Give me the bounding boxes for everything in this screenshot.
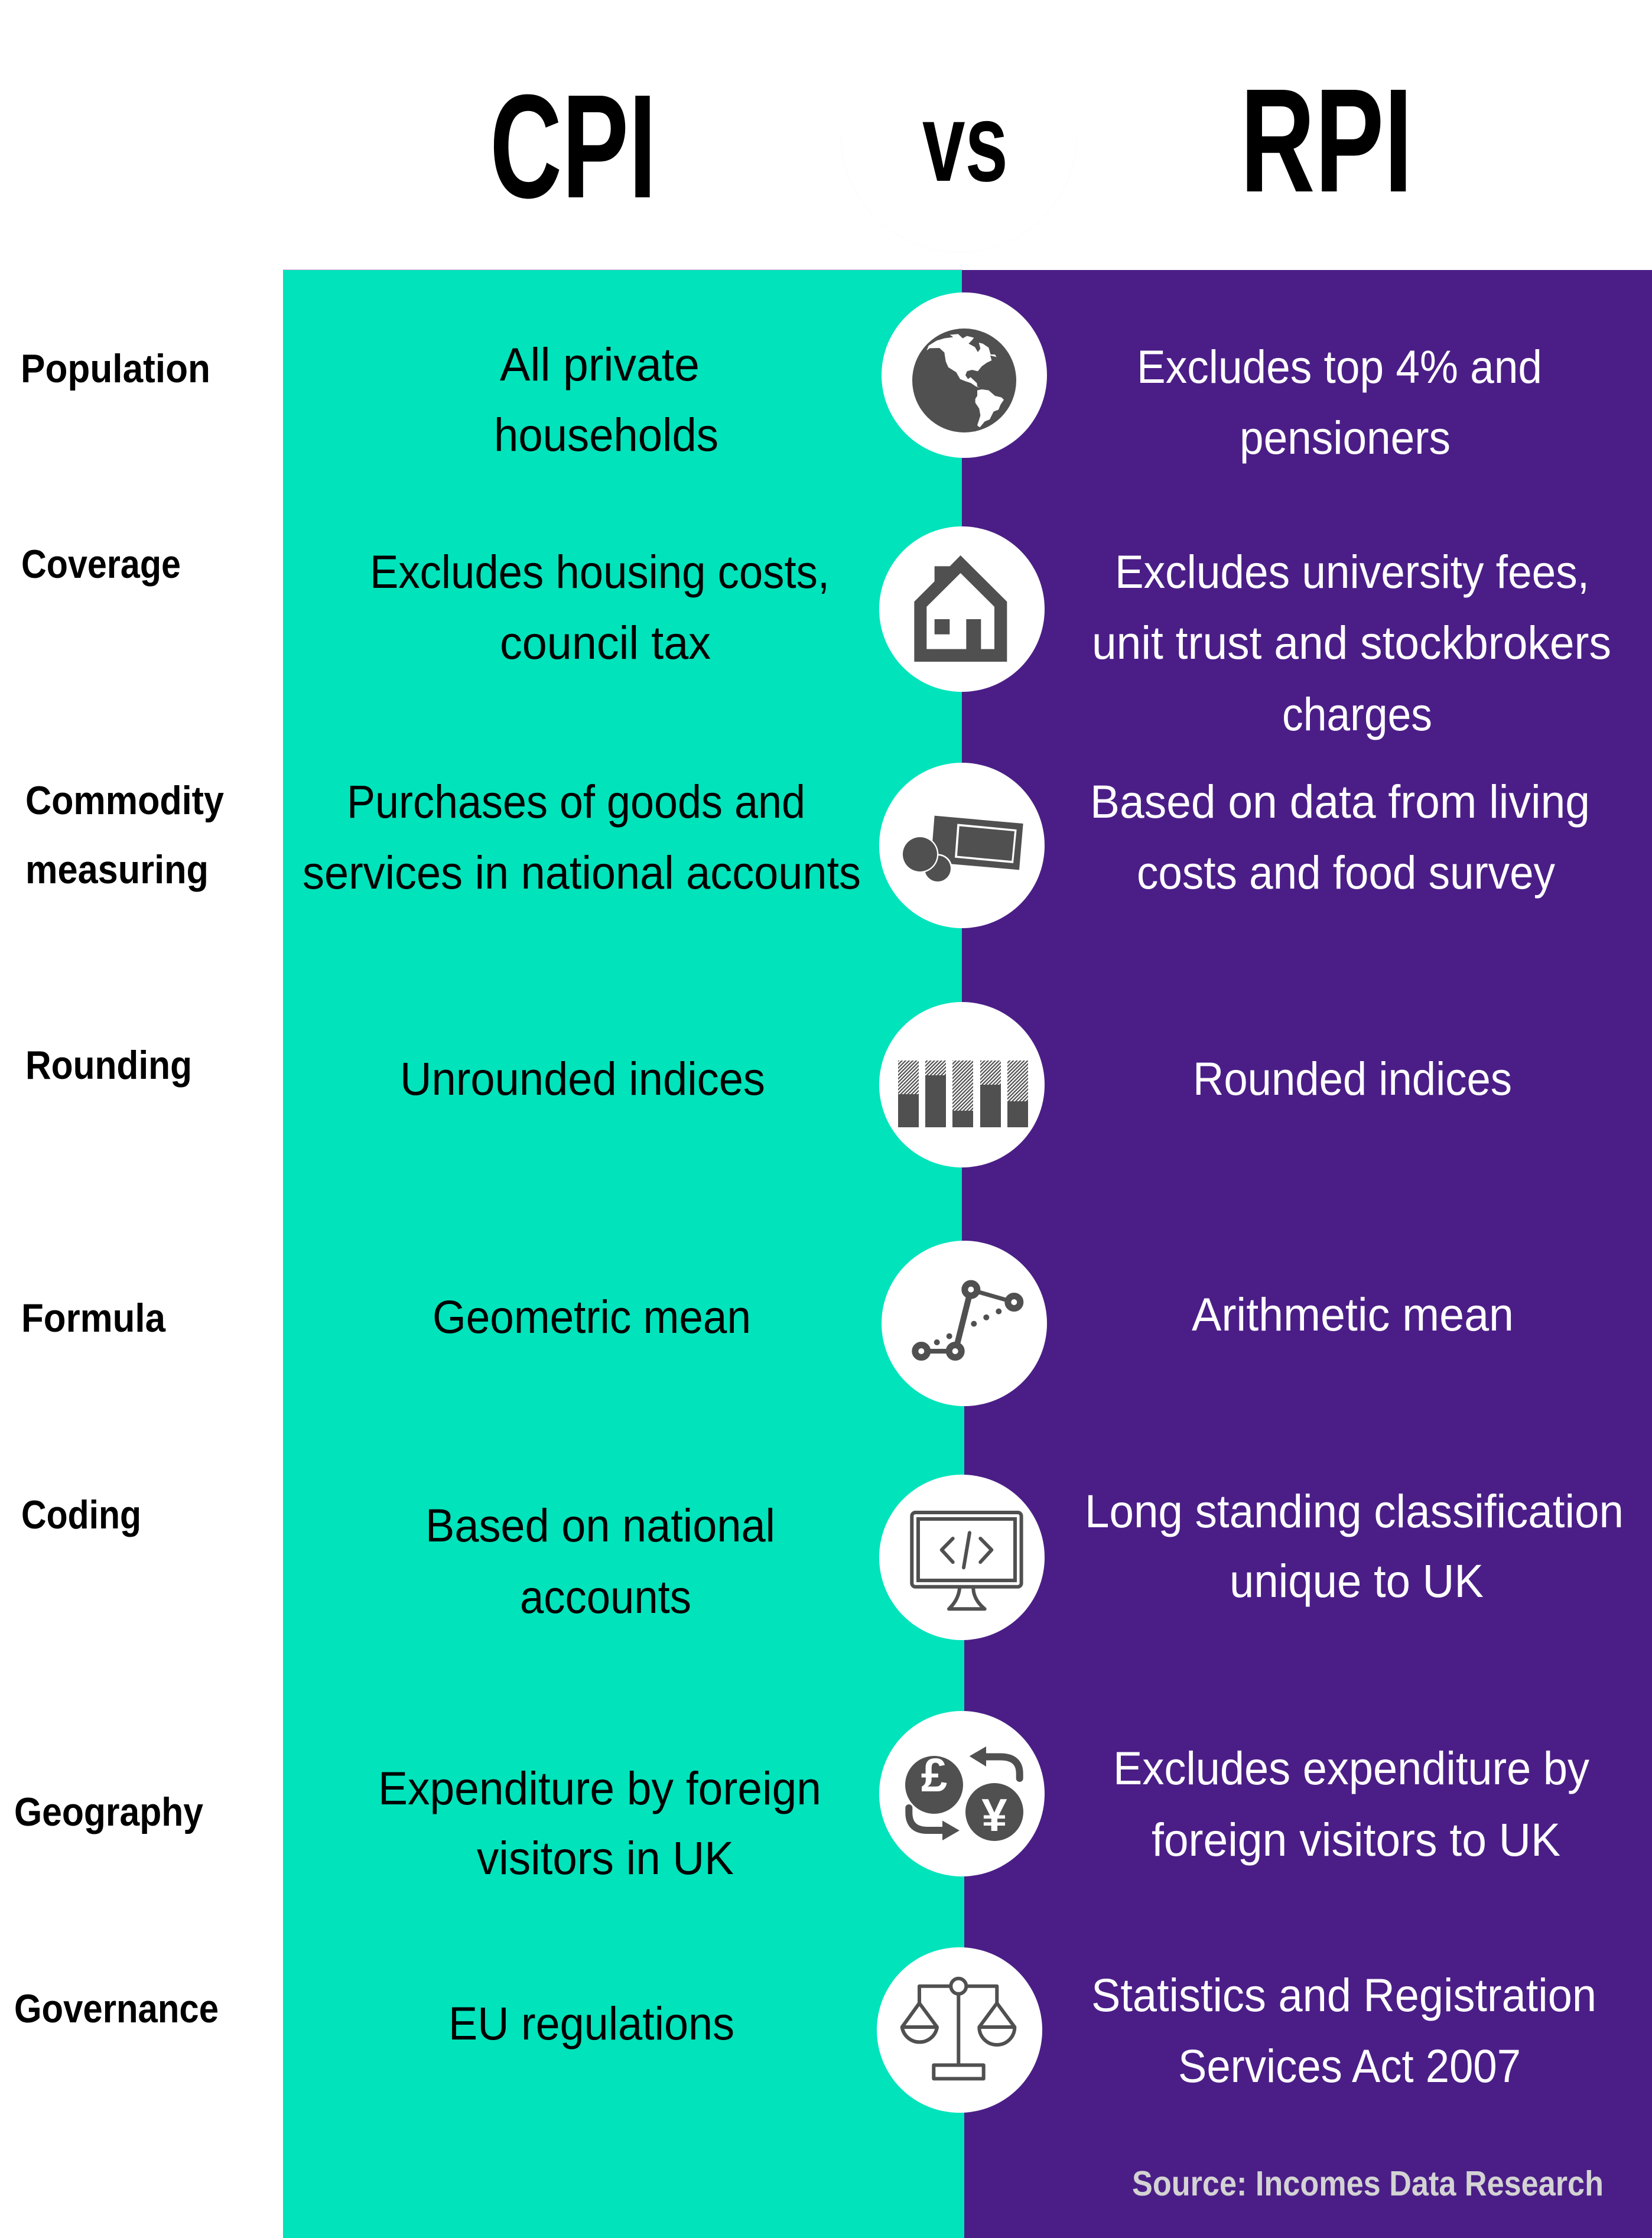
CPI text: geography: visitors in UK — [477, 1832, 734, 1884]
CPI text: governance: EU regulations — [448, 1997, 734, 2050]
RPI text: geography: Excludes expenditure by — [1113, 1742, 1589, 1794]
CPI text: population: households — [494, 408, 718, 461]
RPI text: governance: Statistics and Registration — [1091, 1969, 1596, 2021]
icon: house — [879, 526, 1045, 692]
row label: Rounding: Rounding — [25, 1043, 192, 1088]
RPI text: coverage: unit trust and stockbrokers — [1092, 616, 1611, 669]
icon: currency exchange — [879, 1711, 1045, 1876]
icon: balance scales — [877, 1947, 1042, 2113]
RPI text: commodity measuring: costs and food survey — [1137, 846, 1555, 899]
CPI text: commodity measuring: services in national accounts — [303, 846, 861, 899]
row label: Coding: Coding — [21, 1492, 141, 1537]
heading: vs: vs — [922, 80, 1008, 204]
CPI text: coverage: council tax — [500, 616, 711, 669]
RPI text: coverage — [1092, 545, 1611, 740]
RPI text: commodity measuring — [1090, 775, 1590, 899]
row label: Coverage: Coverage — [21, 542, 181, 587]
source note: Source: Incomes Data Research — [1132, 2164, 1604, 2203]
RPI text: population: pensioners — [1240, 411, 1451, 464]
icon: globe — [882, 292, 1047, 458]
RPI text: coding — [1085, 1485, 1624, 1607]
CPI text: coding — [425, 1499, 775, 1623]
row label: Geography: Geography — [14, 1790, 203, 1834]
icon: bar chart with hatching — [879, 1002, 1045, 1167]
heading: RPI: RPI — [1240, 58, 1413, 223]
RPI text: coding: unique to UK — [1230, 1554, 1484, 1607]
heading: CPI: CPI — [490, 64, 656, 229]
icon: coins and banknote — [879, 763, 1045, 928]
CPI text: commodity measuring — [303, 775, 861, 899]
row label: Commodity measuring — [25, 778, 224, 892]
RPI text: coding: Long standing classification — [1085, 1485, 1624, 1537]
RPI text: governance: Services Act 2007 — [1178, 2039, 1521, 2092]
CPI text: rounding: Unrounded indices — [400, 1052, 765, 1105]
RPI text: coverage: charges — [1282, 688, 1432, 740]
RPI text: formula: Arithmetic mean — [1192, 1288, 1514, 1341]
CPI text: commodity measuring: Purchases of goods and — [347, 775, 805, 828]
row label: Governance: Governance — [14, 1986, 219, 2031]
RPI text: coverage: Excludes university fees, — [1115, 545, 1589, 598]
CPI text: geography: Expenditure by foreign — [378, 1762, 821, 1814]
CPI text: formula: Geometric mean — [432, 1290, 751, 1343]
CPI text: geography — [378, 1762, 821, 1884]
CPI text: coding: Based on national — [425, 1499, 775, 1551]
CPI text: population: All private — [500, 338, 700, 391]
icon: line graph — [882, 1241, 1047, 1406]
row label: Population: Population — [21, 346, 210, 391]
RPI text: population: Excludes top 4% and — [1137, 340, 1542, 393]
CPI text: coding: accounts — [520, 1570, 691, 1623]
RPI text: geography: foreign visitors to UK — [1152, 1813, 1560, 1866]
icon: currency exchange: ¥ — [981, 1789, 1007, 1841]
CPI text: coverage — [370, 545, 830, 669]
row label: Commodity measuring: measuring — [25, 847, 209, 892]
RPI text: geography — [1113, 1742, 1589, 1866]
icon: currency exchange: £ — [921, 1749, 947, 1801]
row label: Commodity measuring: Commodity — [25, 778, 224, 823]
icon: computer monitor with code — [879, 1475, 1045, 1640]
row label: Formula: Formula — [21, 1296, 166, 1341]
RPI text: governance — [1091, 1969, 1596, 2092]
panel: RPI column — [962, 270, 1652, 2238]
RPI text: commodity measuring: Based on data from living — [1090, 775, 1590, 828]
RPI text: rounding: Rounded indices — [1193, 1052, 1512, 1105]
CPI text: population — [494, 338, 718, 461]
RPI text: population — [1137, 340, 1542, 464]
panel: CPI column — [283, 270, 964, 2238]
CPI text: coverage: Excludes housing costs, — [370, 545, 830, 598]
